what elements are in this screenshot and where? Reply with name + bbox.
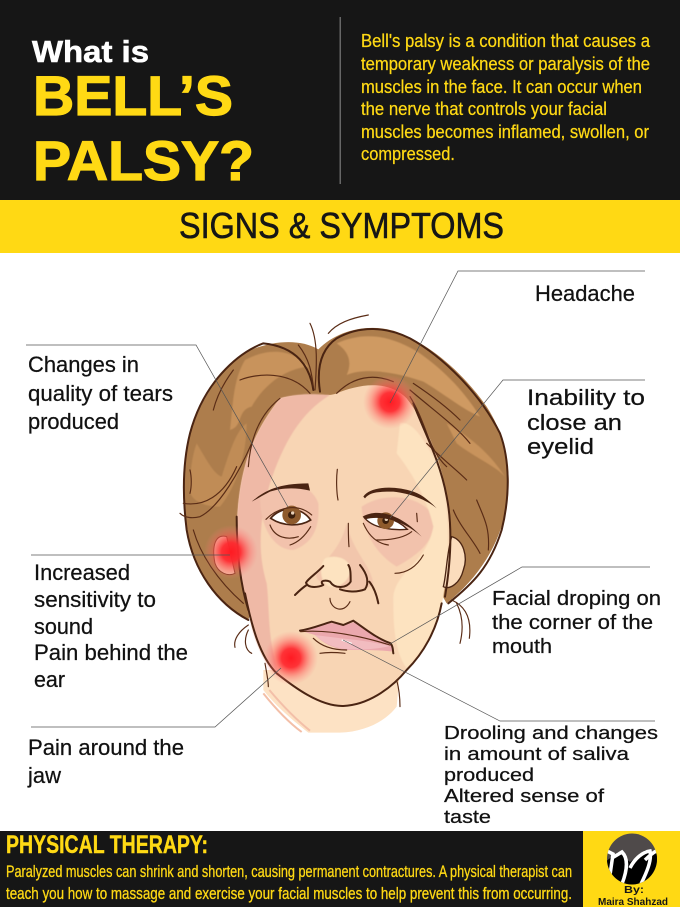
panel: physical therapy footer	[0, 831, 583, 907]
text block: definition: the nerve that controls your facial	[361, 99, 607, 119]
label: author credit	[598, 885, 668, 907]
text block: definition: temporary weakness or paralysis of the	[361, 54, 650, 74]
label: drooling and taste: produced	[444, 765, 534, 785]
icon: author logo	[607, 834, 657, 884]
label: drooling and taste: taste	[444, 807, 491, 827]
label: sound sensitivity and ear pain: sensitivity to	[34, 587, 156, 612]
label: inability to close an eyelid: eyelid	[527, 434, 594, 459]
facial shading	[236, 394, 448, 677]
leader line: sound sensitivity	[31, 554, 230, 556]
title: What is Bell's Palsy?: PALSY?	[33, 129, 254, 192]
hair mass	[184, 328, 509, 620]
pain marker: ear	[204, 525, 258, 579]
label: sound sensitivity and ear pain	[34, 560, 188, 692]
leader line: drooling	[343, 640, 655, 721]
label: headache: Headache	[535, 281, 635, 306]
label: sound sensitivity and ear pain: Pain behind the	[34, 640, 188, 665]
heading: physical therapy: PHYSICAL THERAPY:	[6, 831, 208, 859]
label: inability to close an eyelid: close an	[527, 410, 622, 435]
label: jaw pain: Pain around the	[28, 735, 184, 760]
panel: header background	[0, 0, 680, 200]
label: drooling and taste: Drooling and changes	[444, 723, 658, 743]
label: drooling and taste: Altered sense of	[444, 786, 605, 806]
label: jaw pain: jaw	[27, 763, 61, 788]
right ear	[443, 537, 465, 588]
leader line: jaw	[31, 668, 281, 727]
label: facial drooping: the corner of the	[492, 612, 653, 634]
mouth	[300, 621, 393, 653]
label: facial drooping: Facial droping on	[492, 588, 661, 610]
left eye	[266, 506, 312, 545]
label: facial drooping	[492, 588, 661, 658]
label: sound sensitivity and ear pain: ear	[34, 667, 65, 692]
label: facial drooping: mouth	[492, 636, 552, 658]
left eyebrow	[252, 483, 310, 502]
label: sound sensitivity and ear pain: Increased	[34, 560, 130, 585]
pain marker: jaw	[264, 631, 318, 685]
right eyebrow	[363, 488, 437, 508]
label: changes in tears: Changes in	[28, 352, 139, 377]
label: drooling and taste	[444, 723, 658, 827]
title: What is Bell's Palsy?	[32, 34, 254, 192]
label: changes in tears: quality of tears	[28, 381, 173, 406]
text block: definition: muscles in the face. It can occur when	[361, 77, 642, 97]
label: inability to close an eyelid	[527, 385, 645, 459]
text block: definition	[361, 31, 651, 164]
panel: signs and symptoms banner	[0, 200, 680, 253]
header divider	[340, 17, 341, 184]
text block: definition: compressed.	[361, 144, 455, 164]
leader line: mouth corner	[390, 567, 650, 644]
neck	[263, 670, 400, 733]
label: drooling and taste: in amount of saliva	[444, 744, 630, 764]
text block: definition: muscles becomes inflamed, swollen, or	[361, 122, 649, 142]
title: What is Bell's Palsy?: BELL’S	[33, 64, 233, 127]
title: What is Bell's Palsy?: What is	[32, 34, 149, 69]
label: author credit: By:	[624, 885, 644, 896]
label: changes in tears: produced	[28, 409, 119, 434]
leader line: eyelid	[390, 380, 645, 518]
hair strands and outline	[184, 343, 313, 620]
text block: physical therapy	[6, 862, 572, 903]
illustration: woman's face with facial palsy	[180, 315, 509, 733]
jaw outline	[245, 593, 442, 706]
label: changes in tears	[28, 352, 173, 434]
right eye	[363, 512, 423, 573]
label: jaw pain	[27, 735, 184, 788]
hair highlights	[190, 336, 505, 507]
pain marker: headache	[363, 375, 417, 429]
text block: definition: Bell's palsy is a condition that causes a	[361, 31, 651, 51]
panel: author block	[583, 831, 680, 907]
stray hair near neck	[235, 600, 470, 653]
face skin	[236, 385, 449, 706]
label: inability to close an eyelid: Inability to	[527, 385, 645, 410]
heading: signs and symptoms: SIGNS & SYMPTOMS	[179, 205, 504, 246]
label: sound sensitivity and ear pain: sound	[34, 614, 93, 639]
nose	[337, 469, 349, 547]
leader line: tears	[26, 345, 288, 507]
leader line: headache	[390, 271, 645, 403]
left ear	[214, 536, 235, 575]
